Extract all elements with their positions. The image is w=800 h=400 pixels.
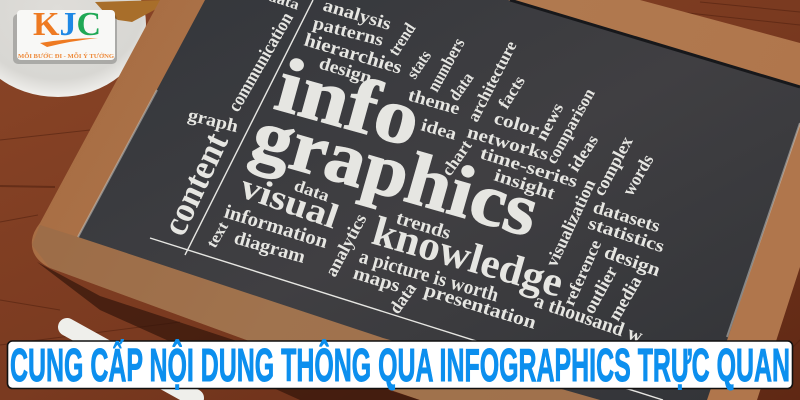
word cloud on chalkboard: time-series (478, 143, 580, 191)
word cloud on chalkboard: outlier (579, 263, 621, 317)
word cloud on chalkboard: statistics (586, 213, 667, 256)
word cloud on chalkboard: data (385, 279, 420, 317)
logo swoosh (40, 38, 98, 47)
frame bottom rail tint (32, 225, 600, 400)
word cloud on chalkboard: networks (465, 122, 551, 164)
chalk dust along slate edges (78, 90, 800, 337)
title banner (8, 339, 792, 391)
pastry on plate (95, 0, 163, 22)
plate (0, 0, 146, 97)
word cloud on chalkboard: knowledge (367, 208, 568, 307)
word cloud on chalkboard: insight (492, 165, 558, 203)
word cloud on chalkboard: content (154, 127, 236, 241)
word cloud on chalkboard: reference (559, 237, 605, 309)
word cloud on chalkboard: data (292, 176, 332, 206)
word cloud on chalkboard: presentation (422, 280, 539, 334)
word cloud on chalkboard: color (492, 108, 542, 140)
logo tagline: MỖI BƯỚC ĐI - MỖI Ý TƯỞNG (18, 52, 114, 60)
word cloud on chalkboard: data (445, 68, 478, 104)
word cloud on chalkboard: visualization (541, 176, 599, 270)
word cloud on chalkboard: trend (384, 19, 420, 59)
word cloud on chalkboard: numbers (423, 35, 469, 95)
word cloud on chalkboard: analytics (321, 210, 370, 280)
word cloud on chalkboard: design (317, 53, 374, 88)
frame shadow (37, 262, 420, 400)
word cloud on chalkboard: text (204, 219, 232, 251)
word cloud on chalkboard: theme (406, 85, 462, 118)
word cloud on chalkboard: diagram (232, 228, 308, 268)
word cloud on chalkboard (154, 0, 667, 348)
chalk stick (67, 327, 195, 398)
word cloud on chalkboard: complex (589, 133, 637, 199)
word cloud on chalkboard: idea (419, 115, 459, 144)
headline word: info: info (267, 41, 430, 163)
word cloud on chalkboard: words (618, 151, 657, 199)
word cloud on chalkboard: facts (494, 72, 529, 112)
dark shadow below top rail (510, 0, 800, 87)
word cloud on chalkboard: architecture (464, 37, 521, 125)
word cloud on chalkboard: graph (186, 104, 240, 136)
word cloud on chalkboard: visual (235, 167, 344, 237)
headline word: graphics: graphics (243, 94, 548, 253)
word cloud on chalkboard: a picture is worth (357, 246, 501, 306)
word cloud on chalkboard: comparison (542, 85, 599, 167)
word cloud on chalkboard: a thousand w (531, 290, 646, 348)
word cloud on chalkboard: media (604, 272, 645, 324)
word cloud on chalkboard: patterns (311, 13, 386, 50)
logo: KJC (13, 6, 117, 64)
word cloud on chalkboard: design (601, 242, 663, 281)
word cloud on chalkboard: news (532, 99, 568, 144)
chalk divider lines (150, 0, 663, 400)
word cloud on chalkboard: chart (438, 136, 476, 179)
word cloud on chalkboard: hierarchies (302, 30, 404, 79)
word cloud on chalkboard: maps (351, 263, 403, 297)
word cloud on chalkboard: trends (394, 208, 453, 244)
word cloud on chalkboard: stats (403, 46, 435, 82)
word cloud on chalkboard: datasets (591, 197, 663, 236)
word cloud on chalkboard: ideas (564, 131, 602, 175)
logo letters: KJC (33, 6, 101, 43)
word cloud on chalkboard: information (222, 201, 330, 253)
